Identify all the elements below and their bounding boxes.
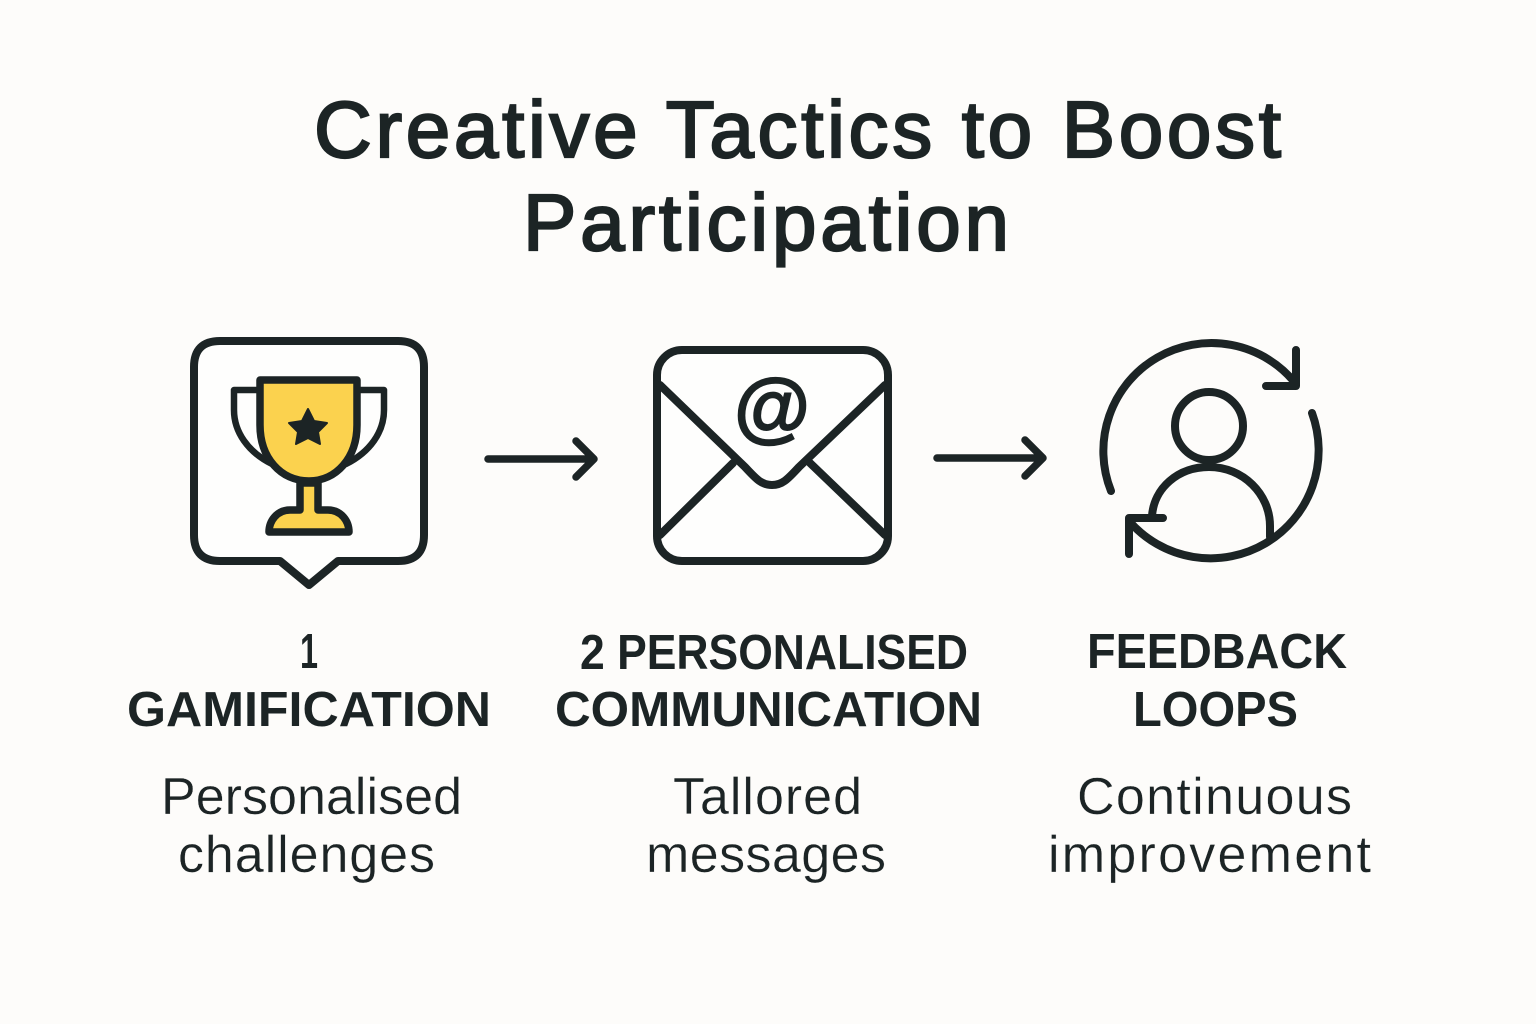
- column 1 heading: 1: [300, 625, 318, 679]
- column 2 heading: COMMUNICATION: [555, 683, 982, 737]
- arrow: gamification to communication: [488, 441, 594, 477]
- icon: person in circular arrows: [1103, 343, 1319, 558]
- title: Participation: [523, 178, 1009, 267]
- column 3 heading: FEEDBACK: [1087, 625, 1347, 679]
- arrow: communication to feedback: [937, 440, 1043, 476]
- column 1 description: Personalised: [161, 768, 462, 826]
- column 2 description: Tallored: [673, 768, 862, 826]
- column 2 description: messages: [646, 826, 886, 884]
- column 1 heading: GAMIFICATION: [127, 683, 491, 737]
- column 1 description: challenges: [178, 826, 435, 884]
- column 3 heading: [1087, 625, 1347, 737]
- column 2 description: [646, 768, 886, 884]
- title: [314, 85, 1281, 267]
- icon: trophy in speech bubble: [194, 341, 424, 585]
- column 3 description: Continuous: [1077, 768, 1352, 826]
- icon: email envelope: [657, 350, 888, 561]
- column 1 description: [161, 768, 462, 884]
- title: Creative Tactics to Boost: [314, 85, 1281, 174]
- column 3 heading: LOOPS: [1133, 683, 1298, 737]
- icon: email envelope: @: [734, 362, 810, 450]
- column 1 heading: [127, 625, 491, 737]
- column 3 description: improvement: [1048, 826, 1372, 884]
- column 3 description: [1048, 768, 1372, 884]
- column 2 heading: [555, 626, 982, 737]
- column 2 heading: 2 PERSONALISED: [580, 626, 968, 680]
